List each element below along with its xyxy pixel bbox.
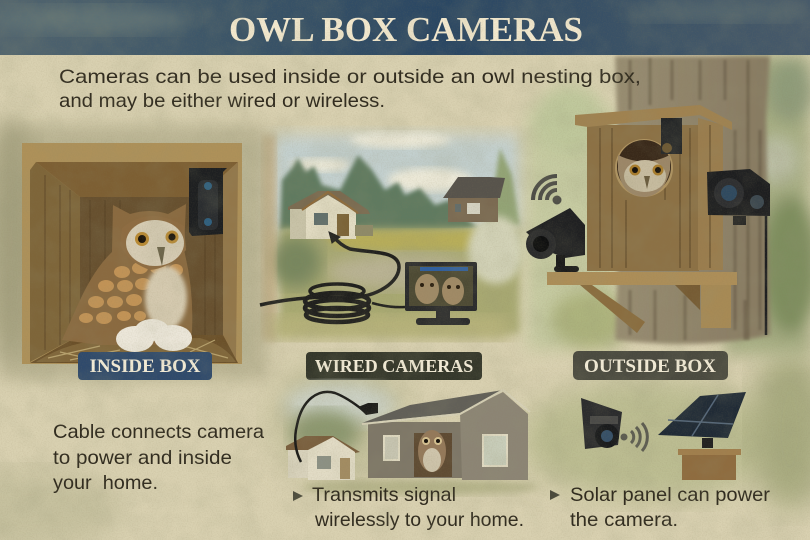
transmit text bbox=[293, 484, 524, 531]
tree trunk bbox=[615, 56, 770, 344]
title banner bbox=[0, 0, 810, 55]
eggs bbox=[116, 319, 192, 352]
label: inside box bbox=[78, 352, 212, 380]
icon: side camera on box bbox=[707, 169, 770, 335]
intro text: and may be either wired or wireless. bbox=[59, 90, 385, 112]
nest bbox=[36, 338, 236, 362]
icon: wifi signal bbox=[533, 176, 560, 202]
scene: countryside landscape bbox=[262, 132, 524, 340]
wired text: your home. bbox=[53, 472, 158, 494]
intro text: Cameras can be used inside or outside an owl nesting box, bbox=[59, 66, 641, 88]
icon: solar panel bbox=[658, 392, 746, 480]
label: outside box: OUTSIDE BOX bbox=[584, 356, 716, 377]
wired text bbox=[53, 421, 264, 494]
small house bbox=[286, 436, 360, 480]
transmit text: Transmits signal bbox=[312, 484, 456, 506]
icon: wireless camera bbox=[581, 398, 622, 449]
cable and arrow bbox=[260, 232, 405, 322]
nest box outside bbox=[547, 105, 737, 333]
transmit text: wirelessly to your home. bbox=[314, 509, 524, 531]
large house bbox=[362, 390, 530, 480]
label: outside box bbox=[573, 351, 728, 380]
icon: owl bbox=[62, 204, 192, 345]
icon: inside camera bbox=[189, 168, 227, 236]
solar text: Solar panel can power bbox=[570, 484, 771, 506]
cable to house bbox=[295, 392, 378, 462]
panel: inside box bbox=[0, 125, 268, 380]
house: near landscape bbox=[288, 191, 373, 239]
solar text: the camera. bbox=[570, 509, 678, 531]
label: inside box: INSIDE BOX bbox=[90, 356, 201, 377]
icon: monitor bbox=[405, 262, 477, 325]
intro text bbox=[59, 66, 641, 112]
solar text bbox=[550, 484, 771, 531]
wired text: Cable connects camera bbox=[53, 421, 264, 443]
house: far landscape bbox=[443, 177, 505, 222]
icon: bullet camera bbox=[526, 208, 585, 272]
foliage right bbox=[500, 55, 810, 355]
label: wired cameras: WIRED CAMERAS bbox=[315, 356, 473, 376]
icon: wifi waves bbox=[622, 423, 647, 451]
label: wired cameras bbox=[306, 352, 482, 380]
wired text: to power and inside bbox=[53, 447, 232, 469]
bottom scene: house with owl bbox=[285, 383, 540, 495]
title banner: OWL BOX CAMERAS bbox=[229, 10, 583, 49]
